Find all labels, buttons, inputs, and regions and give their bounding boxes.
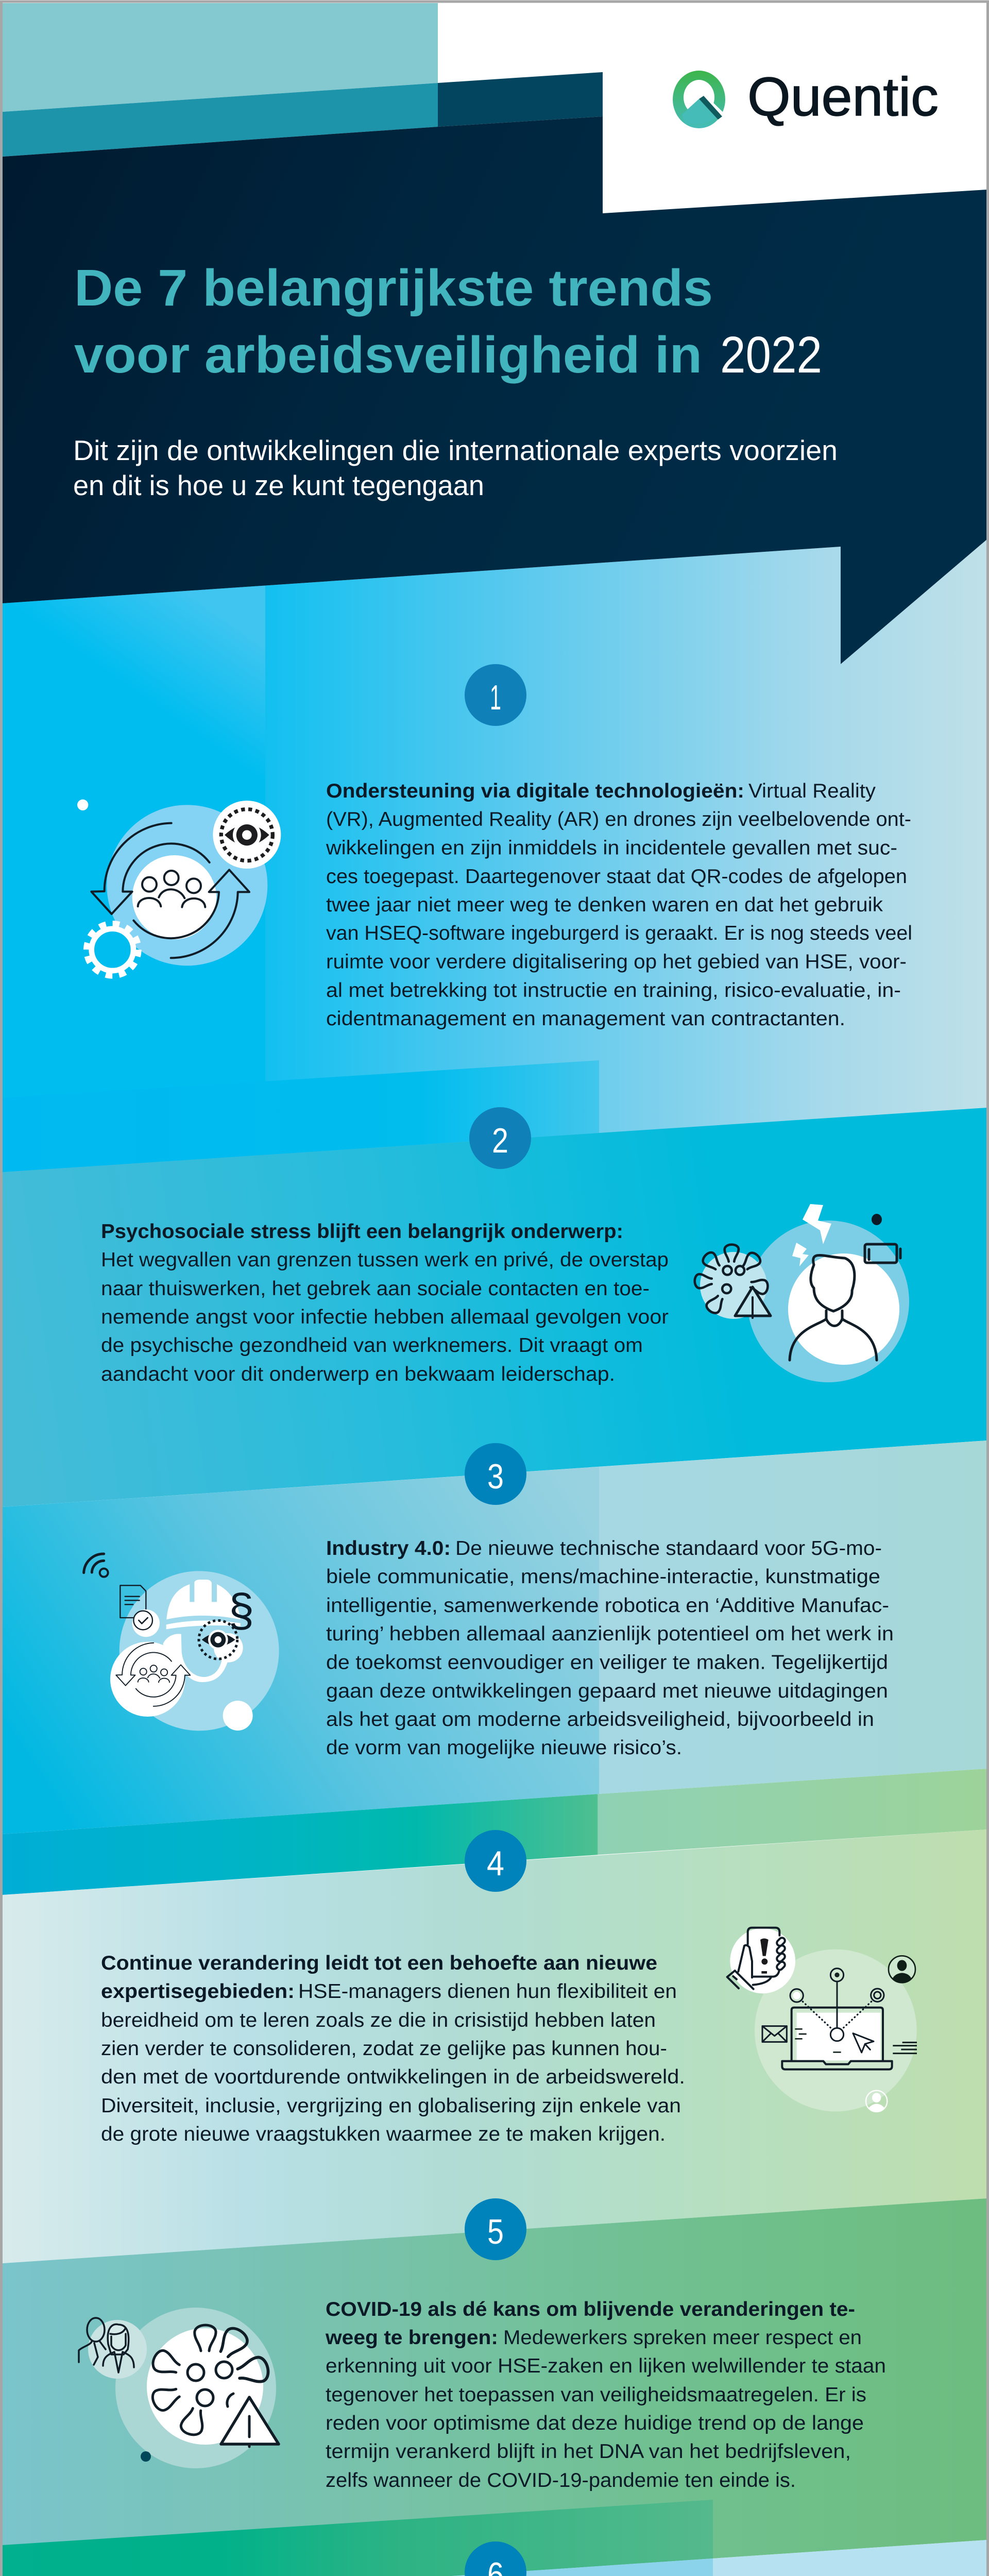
text block: trend 3: turing’ hebben allemaal aanzienlijk potentieel om het werk in bbox=[326, 1623, 894, 1645]
text block: trend 4: expertisegebieden: bbox=[101, 1980, 295, 2003]
panel: trend 3 bbox=[3, 1440, 987, 1895]
text block: trend 1: (VR), Augmented Reality (AR) en drones zijn veelbelovende ont- bbox=[326, 808, 911, 831]
header panel: dark navy bbox=[3, 116, 987, 664]
subtitle bbox=[73, 434, 838, 501]
text block: trend 4: Continue verandering leidt tot een behoefte aan nieuwe bbox=[101, 1952, 657, 1974]
icon: helmet, eye, document, wifi, paragraph sign bbox=[84, 1554, 279, 1731]
icon: people, cycle arrows, eye and gear bbox=[77, 800, 281, 975]
text block: trend 2: naar thuiswerken, het gebrek aan sociale contacten en toe- bbox=[101, 1278, 650, 1300]
panel: trend 6 bbox=[3, 2540, 987, 2576]
number badge 5 bbox=[465, 2198, 526, 2260]
logo: Quentic: Quentic bbox=[747, 66, 939, 127]
text block: trend 1: wikkelingen en zijn inmiddels in incidentele gevallen met suc- bbox=[326, 837, 897, 859]
text block: trend 5: termijn verankerd blijft in het DNA van het bedrijfsleven, bbox=[326, 2441, 851, 2463]
text block: trend 1: twee jaar niet meer weg te denken waren en dat het gebruik bbox=[326, 894, 883, 916]
number badge 6 bbox=[465, 2541, 526, 2576]
text block: trend 4: bereidheid om te leren zoals ze die in crisistijd hebben laten bbox=[101, 2009, 656, 2031]
text block: trend 3: De nieuwe technische standaard voor 5G-mo- bbox=[455, 1537, 882, 1560]
number badge 4: 4 bbox=[487, 1844, 504, 1883]
text block: trend 3: intelligentie, samenwerkende robotica en ‘Additive Manufac- bbox=[326, 1595, 889, 1617]
title bbox=[74, 259, 822, 384]
text block: trend 4: zien verder te consolideren, zodat ze gelijke pas kunnen hou- bbox=[101, 2038, 667, 2060]
text block: trend 4: den met de voortdurende ontwikkelingen in de arbeidswereld. bbox=[101, 2066, 685, 2088]
icon: helmet, eye, document, wifi, paragraph sign: § bbox=[228, 1585, 254, 1637]
title: 2022 bbox=[720, 326, 822, 384]
text block: trend 2: aandacht voor dit onderwerp en bekwaam leiderschap. bbox=[101, 1363, 615, 1385]
text block: trend 1: Virtual Reality bbox=[748, 780, 876, 802]
text block: trend 5: zelfs wanneer de COVID-19-pandemie ten einde is. bbox=[326, 2469, 796, 2492]
text block: trend 1: ruimte voor verdere digitalisering op het gebied van HSE, voor- bbox=[326, 951, 907, 973]
text block: trend 4: HSE-managers dienen hun flexibiliteit en bbox=[298, 1980, 677, 2003]
title: voor arbeidsveiligheid in bbox=[74, 326, 702, 384]
number badge 2: 2 bbox=[492, 1121, 508, 1160]
text block: trend 1: van HSEQ-software ingeburgerd is geraakt. Er is nog steeds veel bbox=[326, 922, 912, 944]
number badge 5: 5 bbox=[487, 2212, 504, 2251]
text block: trend 5: COVID-19 als dé kans om blijvende veranderingen te- bbox=[326, 2298, 855, 2320]
text block: trend 1: cidentmanagement en management van contractanten. bbox=[326, 1008, 845, 1030]
panel: trend 4 bbox=[3, 1829, 987, 2263]
text block: trend 1 bbox=[326, 780, 912, 1030]
header band: top colour blocks bbox=[3, 3, 603, 157]
icon: virus, warning and masked people bbox=[79, 2308, 279, 2468]
text block: trend 4: de grote nieuwe vraagstukken waarmee ze te maken krijgen. bbox=[101, 2123, 666, 2145]
number badge 4 bbox=[465, 1830, 526, 1892]
subtitle: en dit is hoe u ze kunt tegengaan bbox=[73, 469, 484, 501]
text block: trend 4: Diversiteit, inclusie, vergrijzing en globalisering zijn enkele van bbox=[101, 2095, 681, 2117]
text block: trend 2: Psychosociale stress blijft een belangrijk onderwerp: bbox=[101, 1221, 623, 1243]
text block: trend 5: weeg te brengen: bbox=[325, 2327, 498, 2349]
number badge 3: 3 bbox=[487, 1457, 504, 1496]
text block: trend 3: als het gaat om moderne arbeidsveiligheid, bijvoorbeeld in bbox=[326, 1708, 874, 1731]
text block: trend 2: Het wegvallen van grenzen tussen werk en privé, de overstap bbox=[101, 1249, 669, 1271]
text block: trend 1: al met betrekking tot instructie en training, risico-evaluatie, in- bbox=[326, 979, 901, 1002]
subtitle: Dit zijn de ontwikkelingen die internationale experts voorzien bbox=[73, 434, 838, 466]
text block: trend 3: Industry 4.0: bbox=[326, 1537, 451, 1560]
text block: trend 2 bbox=[101, 1221, 669, 1385]
text block: trend 5: reden voor optimisme dat deze huidige trend op de lange bbox=[326, 2412, 864, 2434]
text block: trend 3 bbox=[326, 1537, 894, 1759]
number badge 3 bbox=[465, 1443, 526, 1505]
number badge 1: 1 bbox=[490, 678, 501, 717]
text block: trend 2: de psychische gezondheid van werknemers. Dit vraagt om bbox=[101, 1334, 643, 1357]
panel: trend 2 bbox=[3, 1060, 987, 1507]
icon: Quentic Q mark bbox=[673, 71, 727, 128]
text block: trend 5: erkenning uit voor HSE-zaken en lijken welwillender te staan bbox=[326, 2355, 886, 2377]
text block: trend 5: Medewerkers spreken meer respect en bbox=[503, 2327, 862, 2349]
text block: trend 4 bbox=[101, 1952, 685, 2145]
title: De 7 belangrijkste trends bbox=[74, 259, 713, 317]
text block: trend 5: tegenover het toepassen van veiligheidsmaatregelen. Er is bbox=[326, 2384, 866, 2406]
text block: trend 2: nemende angst voor infectie hebben allemaal gevolgen voor bbox=[101, 1306, 669, 1328]
icon: stressed person, virus, warning, lightning, battery bbox=[695, 1204, 909, 1382]
number badge 2 bbox=[469, 1107, 531, 1169]
number badge 1 bbox=[465, 664, 526, 726]
panel: trend 5 bbox=[3, 2198, 987, 2576]
text block: trend 1: ces toegepast. Daartegenover staat dat QR-codes de afgelopen bbox=[326, 866, 907, 888]
text block: trend 3: gaan deze ontwikkelingen gepaard met nieuwe uitdagingen bbox=[326, 1680, 888, 1702]
text block: trend 3: biele communicatie, mens/machine-interactie, kunstmatige bbox=[326, 1566, 880, 1588]
text block: trend 1: Ondersteuning via digitale technologieën: bbox=[326, 780, 744, 802]
panel: trend 1 bbox=[3, 539, 987, 1180]
text block: trend 3: de toekomst eenvoudiger en veiliger te maken. Tegelijkertijd bbox=[326, 1652, 888, 1673]
text block: trend 5 bbox=[325, 2298, 886, 2492]
text block: trend 3: de vorm van mogelijke nieuwe risico’s. bbox=[326, 1737, 682, 1759]
logo: Quentic bbox=[673, 66, 939, 128]
icon: laptop network, phone alert, avatars bbox=[727, 1928, 917, 2112]
